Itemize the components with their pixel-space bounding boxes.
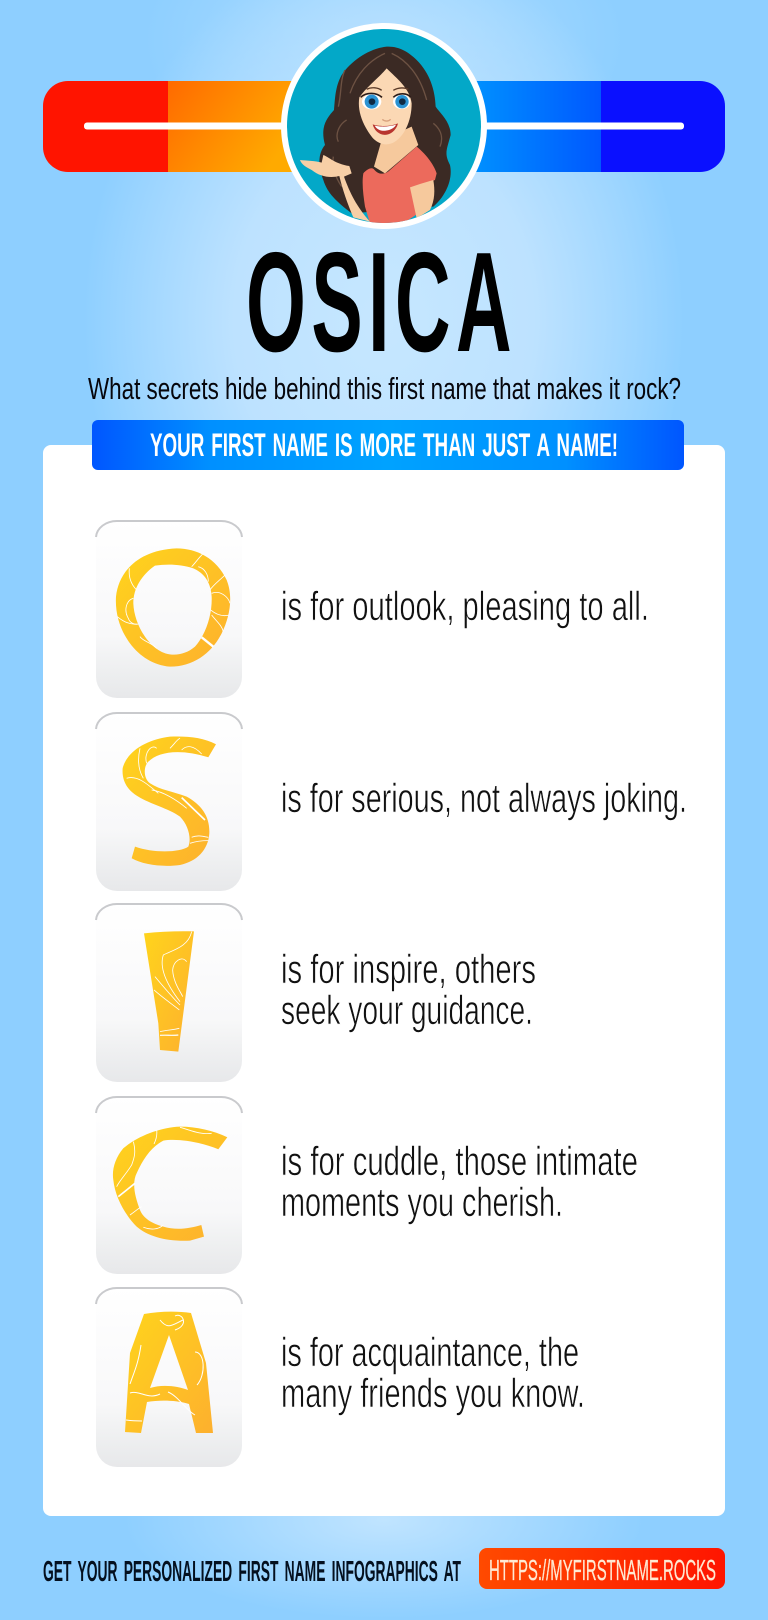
letter card I xyxy=(96,903,242,1082)
tagline banner xyxy=(92,420,684,470)
text: A xyxy=(281,1329,585,1416)
text: I: is for inspire, others xyxy=(281,946,536,992)
header colour bar xyxy=(43,81,725,172)
avatar portrait xyxy=(281,23,487,229)
text: C xyxy=(281,1138,638,1225)
text: A: many friends you know. xyxy=(281,1370,585,1416)
eyes xyxy=(362,94,381,109)
hair xyxy=(319,47,451,213)
letter card C xyxy=(96,1096,242,1274)
text: C: is for cuddle, those intimate xyxy=(281,1138,638,1184)
text: I xyxy=(281,946,536,1033)
title: OSICA xyxy=(246,223,517,382)
nose and mouth xyxy=(382,119,391,121)
white content panel xyxy=(43,445,725,1516)
footer url button xyxy=(479,1548,725,1589)
top xyxy=(363,147,437,223)
text: I: seek your guidance. xyxy=(281,987,533,1033)
arms xyxy=(410,180,434,218)
text: C: moments you cherish. xyxy=(281,1179,563,1225)
letter card O xyxy=(96,520,242,698)
neck xyxy=(374,127,418,173)
face xyxy=(359,68,412,144)
text: A: is for acquaintance, the xyxy=(281,1329,579,1375)
letter card A xyxy=(96,1287,242,1467)
letter card S xyxy=(96,712,242,891)
hair highlights xyxy=(333,53,442,187)
